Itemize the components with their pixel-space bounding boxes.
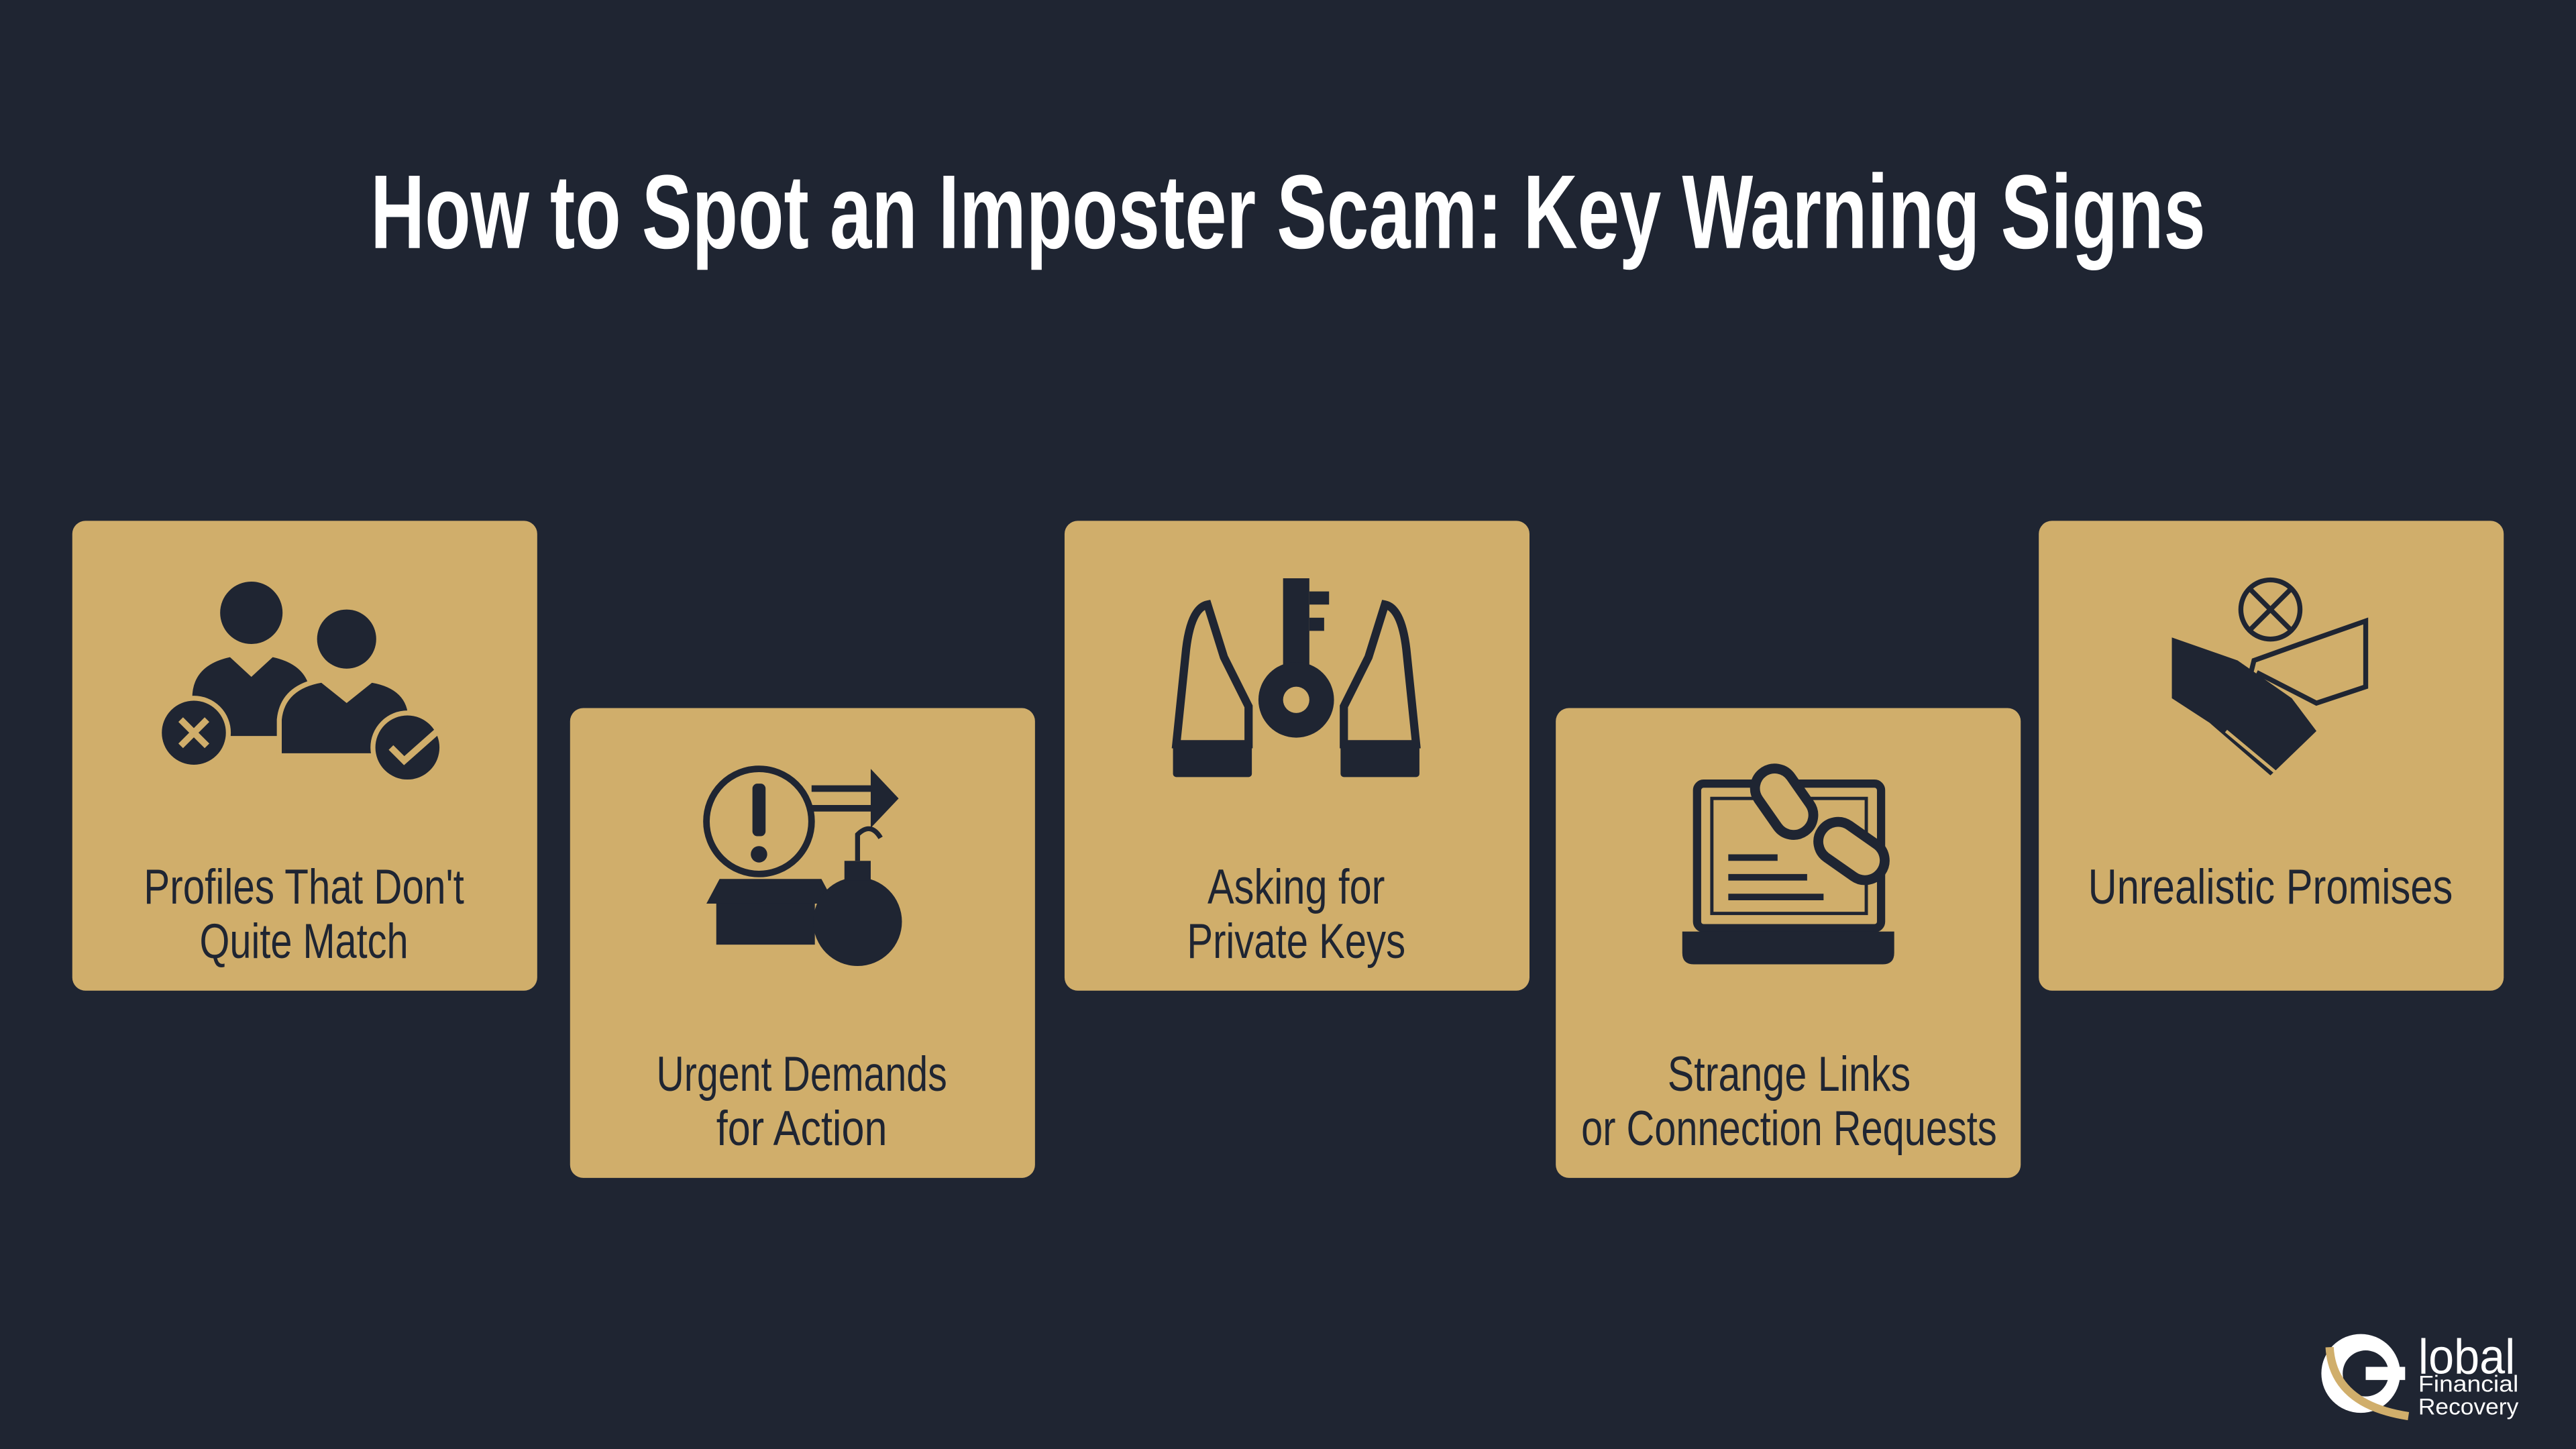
icon: two people bbox=[160, 582, 447, 782]
icon: handshake with x bbox=[2172, 580, 2366, 775]
icon: laptop with chain bbox=[1682, 761, 1894, 965]
label: private keys: Private Keys bbox=[1187, 913, 1405, 969]
logo: Recovery bbox=[2418, 1395, 2519, 1420]
panel: unrealistic promises bbox=[2039, 521, 2504, 991]
panel: urgent demands bbox=[570, 708, 1035, 1178]
icon: hands with key bbox=[1173, 578, 1419, 777]
label: profiles: Profiles That Don't bbox=[144, 859, 464, 914]
label: strange links: Strange Links bbox=[1668, 1046, 1911, 1102]
logo bbox=[2321, 1328, 2519, 1420]
label: profiles: Quite Match bbox=[200, 913, 409, 969]
panel: private keys bbox=[1065, 521, 1529, 991]
logo: Financial bbox=[2418, 1371, 2518, 1397]
label: urgent demands bbox=[656, 1046, 947, 1156]
logo: lobal bbox=[2418, 1328, 2515, 1384]
label: unrealistic promises: Unrealistic Promises bbox=[2088, 859, 2453, 914]
label: profiles bbox=[144, 859, 464, 969]
panel: profiles bbox=[72, 521, 537, 991]
label: strange links: or Connection Requests bbox=[1581, 1100, 1997, 1156]
icon: alert box bomb bbox=[706, 769, 902, 966]
label: urgent demands: Urgent Demands bbox=[656, 1046, 947, 1102]
label: strange links bbox=[1581, 1046, 1997, 1156]
label: urgent demands: for Action bbox=[716, 1100, 887, 1156]
label: private keys: Asking for bbox=[1208, 859, 1385, 914]
label: private keys bbox=[1187, 859, 1405, 969]
panel: strange links bbox=[1556, 708, 2021, 1178]
